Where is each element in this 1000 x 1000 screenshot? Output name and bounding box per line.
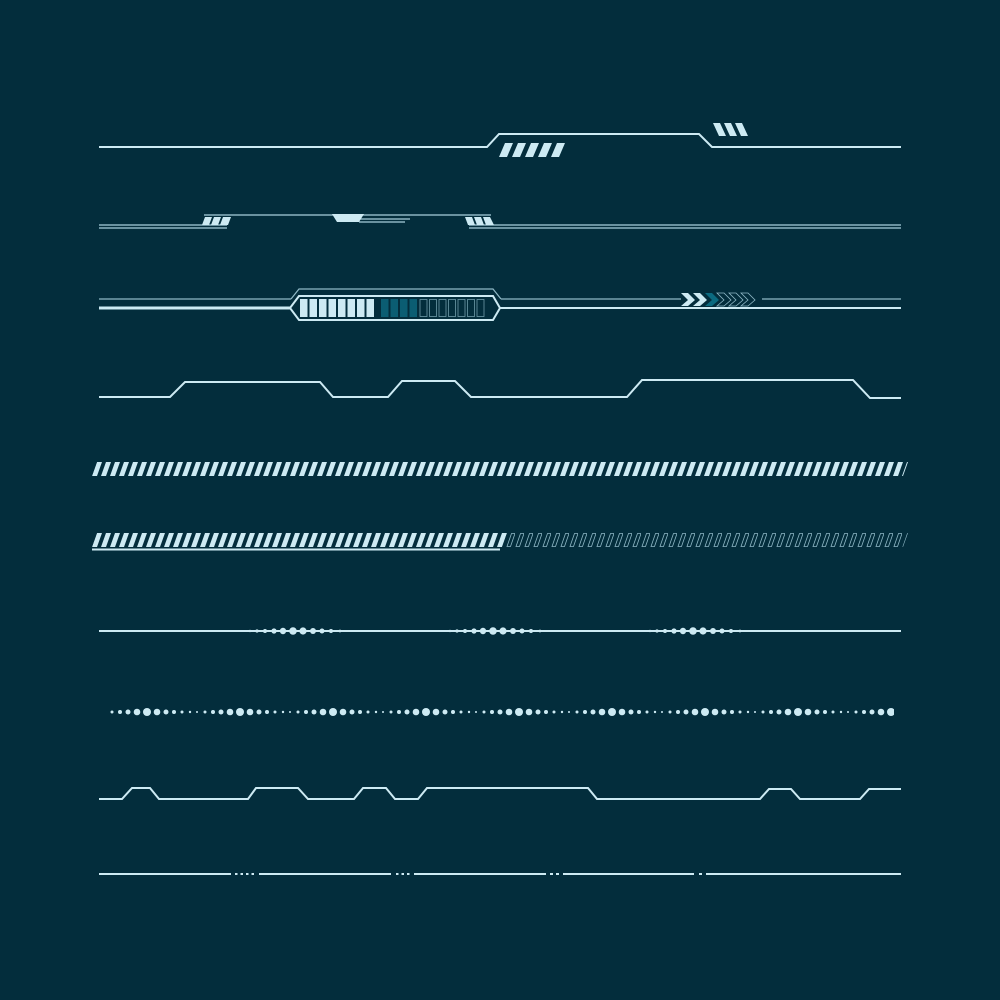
divider 5: hazard stripe bar: [92, 462, 908, 476]
divider 10: segmented line: [99, 873, 901, 875]
divider 7: line with dot clusters: [99, 627, 901, 635]
divider 2: double line with bracket: [99, 214, 901, 228]
divider 1: raised segment with stripes: [99, 123, 901, 157]
divider 6: half-filled stripe bar: [92, 533, 908, 550]
icon: chevron arrows: [681, 293, 755, 306]
divider 9: stepped line: [99, 788, 901, 799]
divider 3: progress bar with arrows: [99, 289, 901, 320]
divider 4: stepped line: [99, 380, 901, 398]
divider 8: dotted row: [106, 700, 894, 724]
